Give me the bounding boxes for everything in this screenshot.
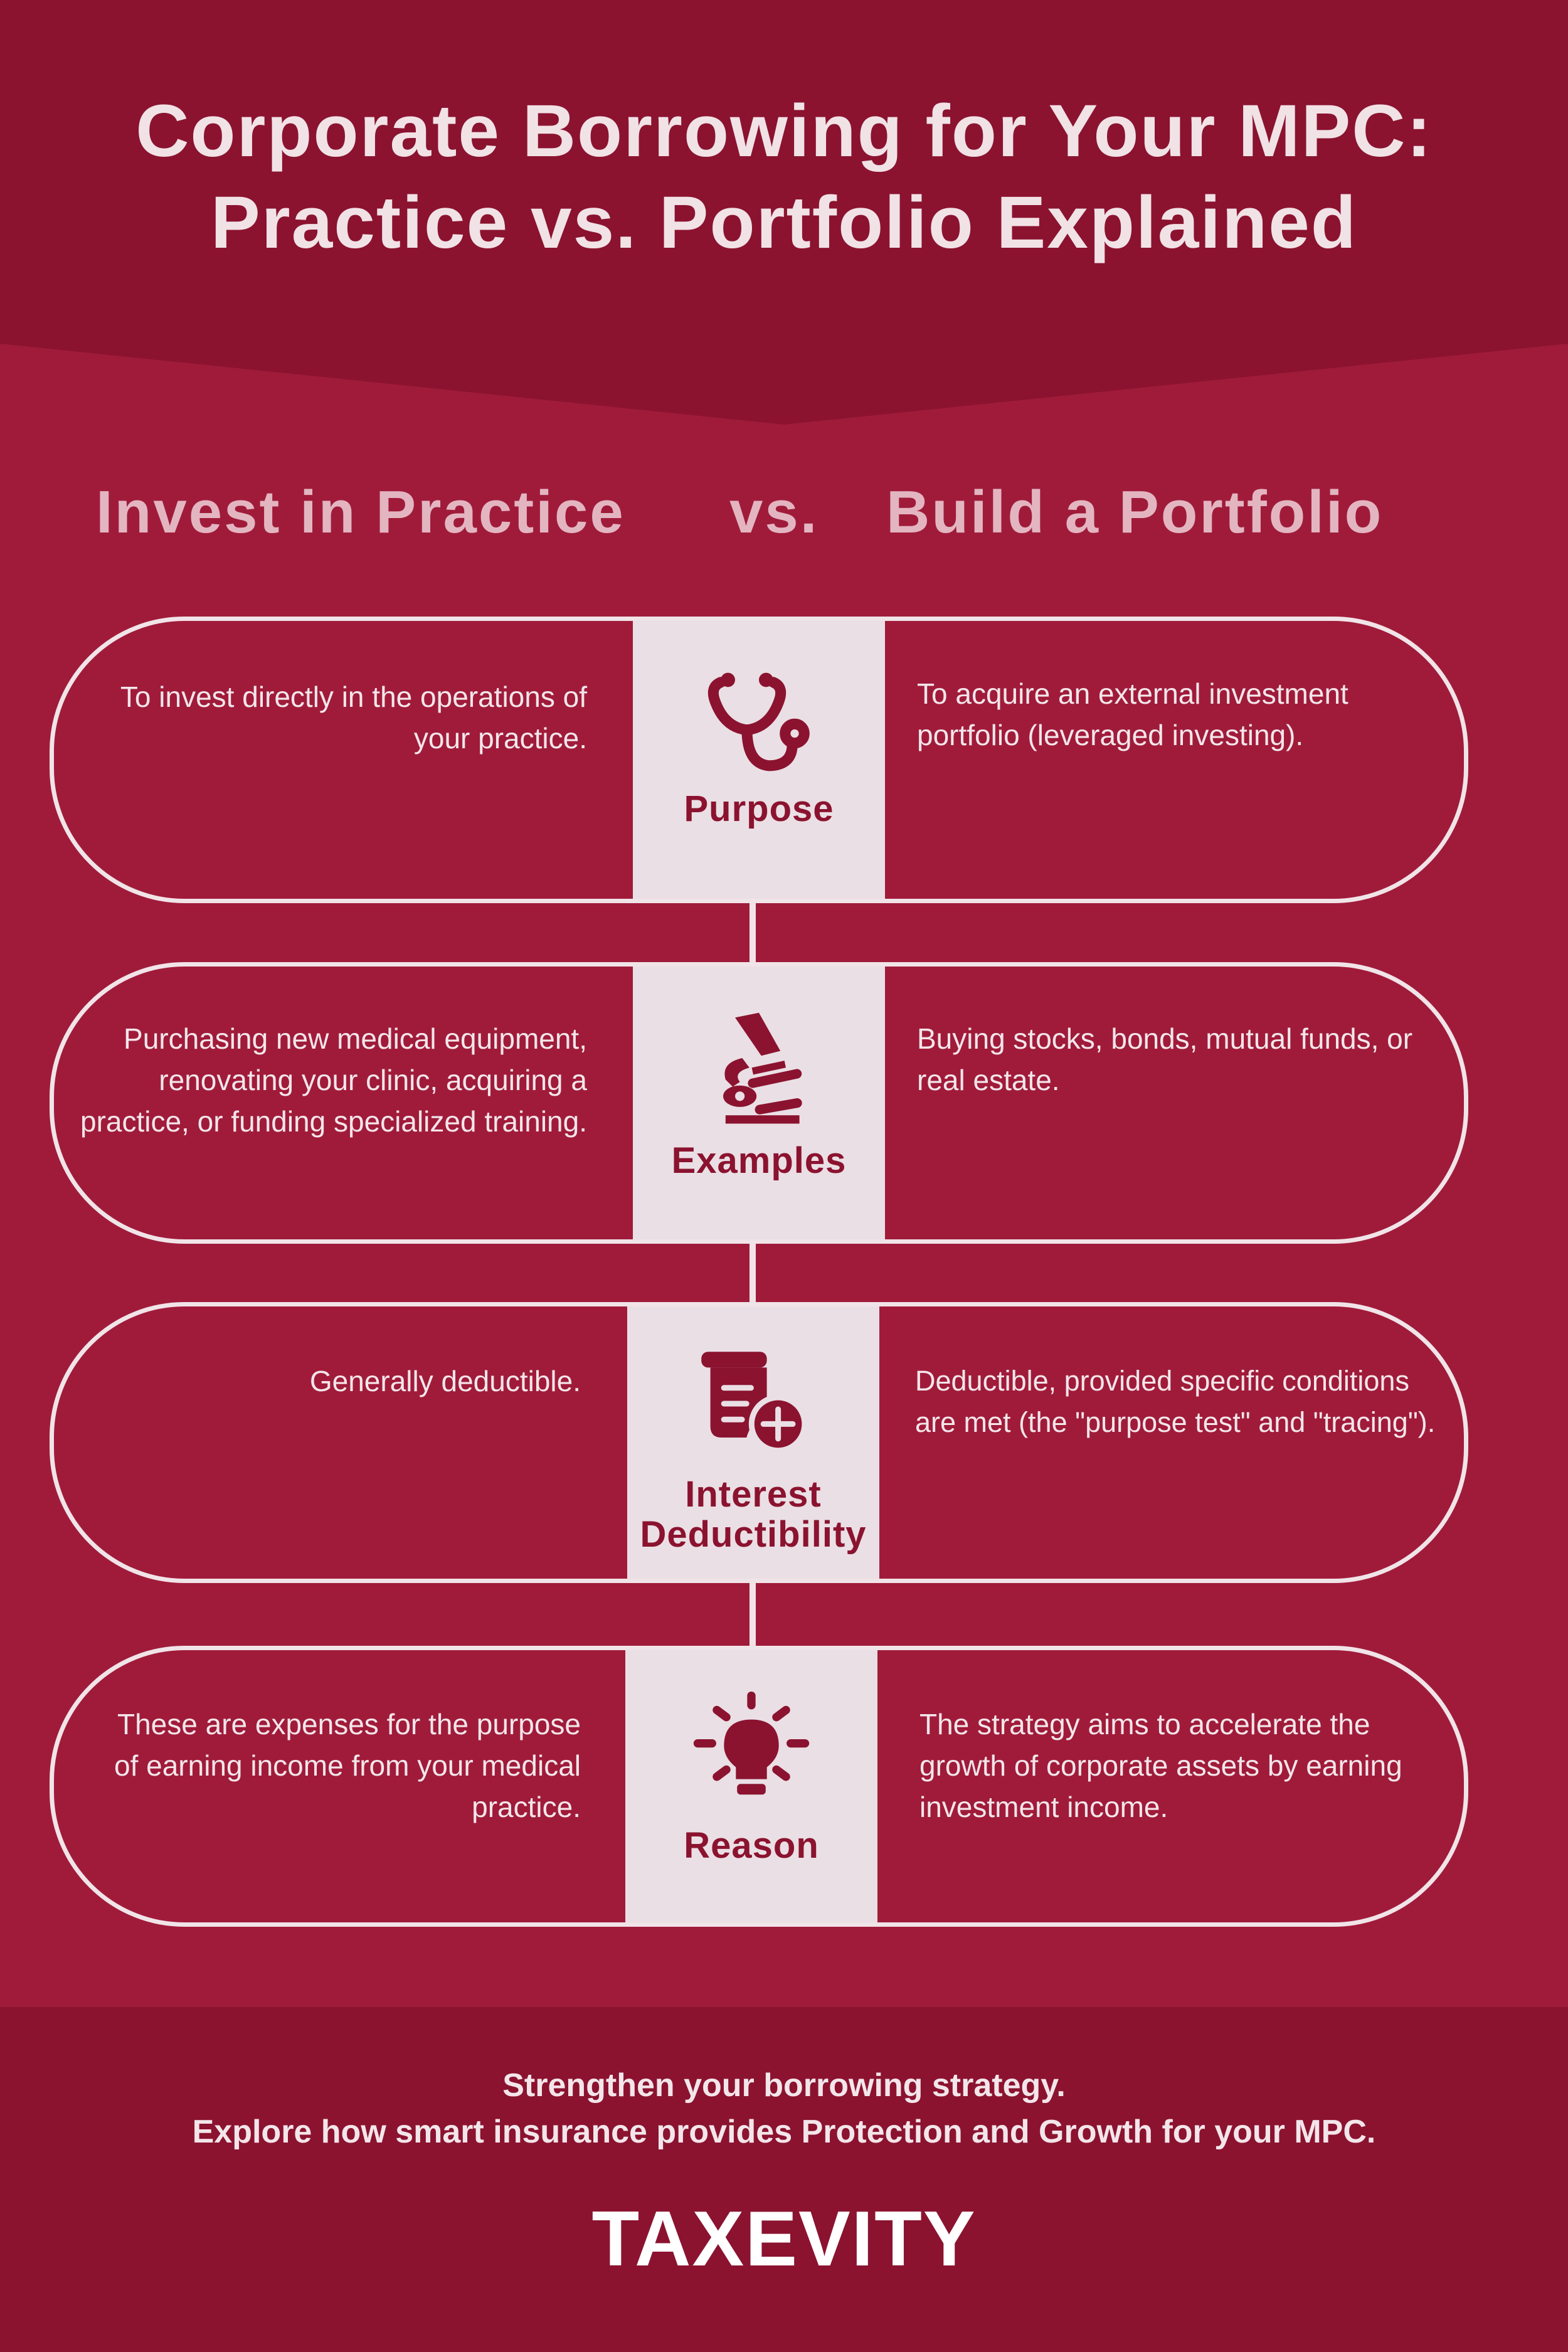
label: purpose: Purpose — [684, 788, 834, 829]
text: portfolio examples: real estate. — [917, 1064, 1060, 1096]
panel: purpose — [633, 621, 885, 899]
row: purpose — [50, 617, 1468, 903]
text: practice deductibility: Generally deductible. — [310, 1365, 581, 1397]
text: portfolio reason — [919, 1708, 1402, 1823]
footer call to action: Explore how smart insurance provides Protection and Growth for your MPC. — [193, 2114, 1375, 2150]
heading: invest in practice: Invest in Practice — [96, 479, 625, 546]
icon: document plus — [701, 1352, 802, 1448]
text: practice examples: Purchasing new medical equipment, — [124, 1022, 587, 1055]
text: portfolio purpose: To acquire an external investment — [917, 677, 1348, 710]
footer call to action: Strengthen your borrowing strategy. — [502, 2067, 1066, 2104]
icon: microscope — [723, 1012, 802, 1124]
text: portfolio reason: The strategy aims to accelerate the — [919, 1708, 1370, 1740]
text: practice reason: practice. — [472, 1791, 581, 1823]
text: practice examples: practice, or funding specialized training. — [80, 1105, 587, 1138]
text: portfolio purpose: portfolio (leveraged investing). — [917, 719, 1303, 751]
text: practice purpose: To invest directly in the operations of — [120, 681, 587, 713]
text: practice purpose — [120, 681, 587, 755]
label: reason: Reason — [684, 1825, 819, 1866]
row: interest deductibility — [50, 1302, 1468, 1583]
row: examples — [50, 962, 1468, 1244]
text: practice reason: These are expenses for the purpose — [117, 1708, 581, 1740]
footer band — [0, 2007, 1568, 2352]
title: Corporate Borrowing for Your MPC: — [135, 90, 1433, 172]
text: portfolio deductibility: Deductible, provided specific conditions — [915, 1365, 1409, 1397]
label: interest deductibility — [640, 1474, 867, 1555]
title: Practice vs. Portfolio Explained — [211, 181, 1357, 264]
text: portfolio examples — [917, 1022, 1412, 1096]
icon: stethoscope — [707, 672, 810, 771]
row: reason — [50, 1646, 1468, 1927]
text: practice purpose: your practice. — [414, 722, 587, 755]
label: interest deductibility: Deductibility — [640, 1514, 867, 1555]
text: practice examples: renovating your clinic, acquiring a — [159, 1064, 587, 1096]
text: portfolio purpose — [917, 677, 1348, 751]
text: practice reason: of earning income from your medical — [114, 1749, 581, 1782]
label: interest deductibility: Interest — [685, 1474, 822, 1515]
panel: interest deductibility — [627, 1306, 879, 1579]
heading: build a portfolio: Build a Portfolio — [886, 479, 1383, 546]
panel: reason — [625, 1650, 877, 1922]
icon: lightbulb — [694, 1692, 809, 1795]
label: examples: Examples — [672, 1140, 846, 1181]
text: practice reason — [114, 1708, 581, 1823]
title — [135, 90, 1433, 264]
heading: vs: vs. — [729, 479, 818, 546]
footer call to action — [193, 2067, 1375, 2150]
text: portfolio deductibility — [915, 1365, 1435, 1438]
logo: taxevity: TAXEVITY — [591, 2196, 977, 2282]
header band — [0, 0, 1568, 425]
text: practice examples — [80, 1022, 587, 1138]
text: portfolio examples: Buying stocks, bonds, mutual funds, or — [917, 1022, 1412, 1055]
text: portfolio deductibility: are met (the "purpose test" and "tracing"). — [915, 1406, 1435, 1438]
panel: examples — [633, 967, 885, 1239]
text: portfolio reason: growth of corporate assets by earning — [919, 1749, 1402, 1782]
text: portfolio reason: investment income. — [919, 1791, 1168, 1823]
